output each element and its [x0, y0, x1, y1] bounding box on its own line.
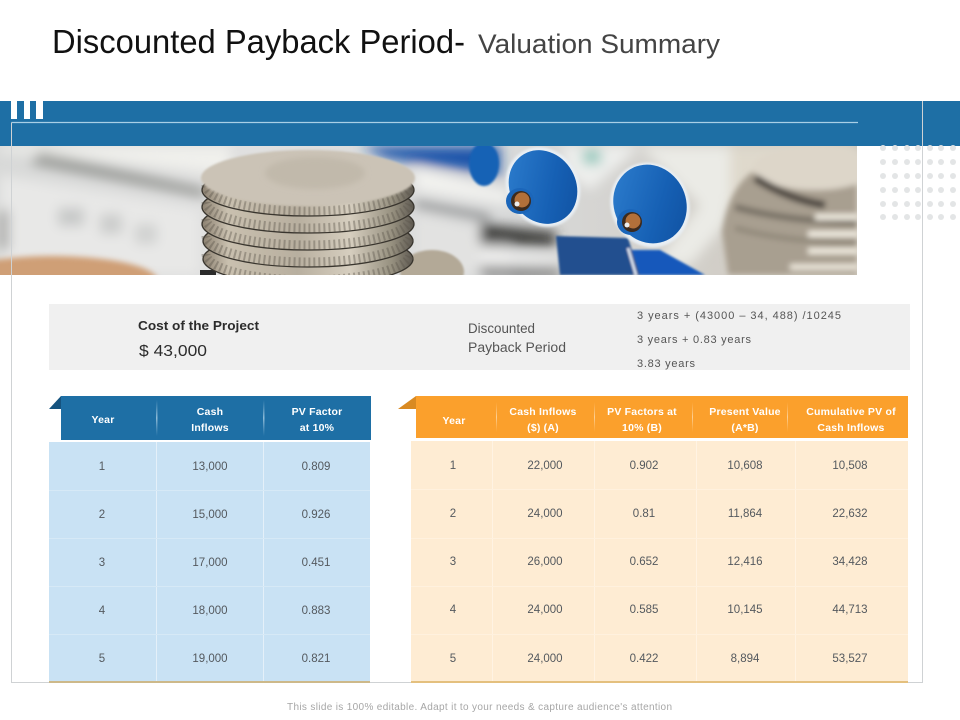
left table body: 0.821 [302, 653, 330, 665]
right table header: Year [442, 415, 466, 427]
right table body: 53,527 [832, 653, 868, 665]
discounted payback period label: Discounted [468, 321, 535, 336]
left table body: 18,000 [192, 605, 228, 617]
left table body: 15,000 [192, 509, 228, 521]
discounted payback period label [468, 321, 566, 355]
right table body: 11,864 [728, 508, 763, 520]
payback calculation: 3.83 years [637, 358, 696, 370]
icon: orange header fold [398, 396, 416, 409]
left table body: 0.926 [302, 509, 330, 521]
cost of the project [138, 319, 260, 360]
right table body: 12,416 [727, 556, 763, 568]
right table body: 0.902 [630, 460, 658, 472]
right table body: 5 [450, 653, 456, 665]
payback calculation: 3 years + 0.83 years [637, 334, 752, 346]
right table header: 10% (B) [622, 422, 662, 434]
right table body: 8,894 [731, 653, 760, 665]
panel: project summary [49, 304, 910, 370]
left table header: PV Factor [292, 406, 342, 418]
right table header: Cash Inflows [817, 422, 885, 434]
left table header: Cash [197, 406, 223, 418]
blue header band [0, 101, 960, 146]
right table body [411, 441, 908, 683]
right table body: 24,000 [527, 653, 563, 665]
title [52, 23, 721, 60]
right table body: 22,632 [832, 508, 868, 520]
right table header: ($) (A) [527, 422, 559, 434]
right table header: (A*B) [731, 422, 759, 434]
right table body: 0.81 [633, 508, 655, 520]
pen cap 2 [610, 162, 690, 248]
right table body: 0.652 [630, 556, 658, 568]
left table body: 4 [99, 605, 106, 617]
left table body: 19,000 [192, 653, 228, 665]
left table body: 2 [99, 509, 105, 521]
right table header: PV Factors at [607, 406, 677, 418]
bottom blue pen [556, 236, 705, 275]
copper coin [0, 252, 159, 275]
left table body: 0.451 [302, 557, 330, 569]
right table body: 22,000 [527, 460, 563, 472]
right table body: 0.422 [630, 653, 658, 665]
right table body: 24,000 [527, 604, 563, 616]
right table header [416, 396, 908, 438]
left table body: 0.809 [302, 461, 330, 473]
payback calculation [637, 310, 841, 370]
icon: blue header fold [49, 396, 61, 409]
left table body: 0.883 [302, 605, 330, 617]
right table header: Present Value [709, 406, 781, 418]
left table header: Year [92, 414, 114, 426]
right table body: 10,608 [727, 460, 763, 472]
title: Valuation Summary [478, 29, 721, 59]
right table body: 10,508 [832, 460, 868, 472]
left table body: 1 [99, 461, 105, 473]
left table: cash inflows [49, 396, 371, 683]
right table header: Cumulative PV of [806, 406, 896, 418]
left table body: 3 [99, 557, 105, 569]
right table: cumulative present value [398, 396, 908, 683]
right table header: Cash Inflows [509, 406, 577, 418]
right blurred coin stack [719, 170, 857, 275]
right table body: 26,000 [527, 556, 563, 568]
footer note: This slide is 100% editable. Adapt it to your needs & capture audience's attention [287, 702, 672, 713]
center coin stack [201, 150, 415, 285]
right table body: 4 [450, 604, 457, 616]
icon: white tab bars [11, 101, 43, 119]
left table body [49, 442, 370, 683]
cost of the project: $ 43,000 [139, 343, 207, 360]
right table body: 44,713 [832, 604, 868, 616]
cost of the project: Cost of the Project [138, 319, 260, 333]
right table body: 24,000 [527, 508, 563, 520]
right table body: 1 [450, 460, 456, 472]
right table body: 3 [450, 556, 456, 568]
slide frame [12, 101, 922, 682]
left blue cap fragment [469, 142, 499, 186]
coin under the stack [399, 248, 465, 275]
right table body: 34,428 [832, 556, 868, 568]
payback calculation: 3 years + (43000 – 34, 488) /10245 [637, 310, 841, 322]
photo: coins and blue pens [0, 146, 857, 275]
right table body: 10,145 [727, 604, 763, 616]
right table body: 2 [450, 508, 456, 520]
background paper stripes [0, 146, 857, 275]
left table header [61, 396, 371, 440]
left table body: 5 [99, 653, 105, 665]
left table header: at 10% [300, 422, 335, 434]
pen cap 1 [505, 146, 581, 228]
discounted payback period label: Payback Period [468, 340, 566, 355]
left table header: Inflows [191, 422, 229, 434]
dot pattern [880, 145, 956, 220]
left table body: 13,000 [192, 461, 228, 473]
right table body: 0.585 [630, 604, 658, 616]
left table body: 17,000 [192, 557, 228, 569]
title: Discounted Payback Period- [52, 23, 465, 60]
